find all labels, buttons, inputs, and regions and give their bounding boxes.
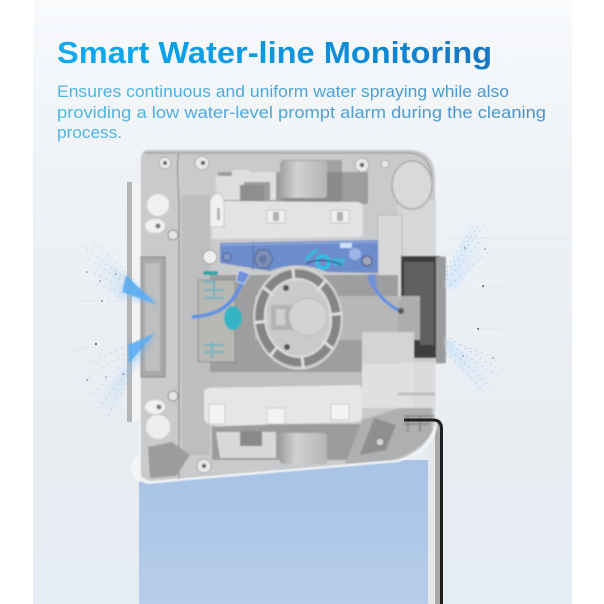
upper mechanism bbox=[216, 170, 276, 200]
window glass bbox=[139, 460, 428, 604]
spray wedges bbox=[445, 222, 490, 290]
device shell bbox=[140, 149, 446, 483]
left knobs bbox=[145, 194, 178, 439]
lower motor bbox=[280, 433, 327, 464]
lower dark recess bbox=[212, 424, 362, 460]
lower right gear area bbox=[345, 408, 432, 464]
left channel column bbox=[182, 195, 210, 455]
description text: Ensures continuous and uniform water spraying while also bbox=[57, 82, 509, 101]
left translucent box bbox=[141, 257, 165, 377]
left water spray bbox=[72, 240, 157, 416]
spray rays bbox=[80, 240, 152, 416]
fan hub bbox=[271, 285, 327, 350]
title: Smart Water-line Monitoring bbox=[57, 35, 492, 70]
screw posts bbox=[159, 156, 389, 473]
right bottom bracket bbox=[404, 416, 434, 432]
hex nut bbox=[254, 250, 273, 268]
window frame and strip bbox=[127, 182, 440, 604]
description text bbox=[57, 82, 546, 142]
round filter ring top right bbox=[392, 161, 432, 209]
translucent right area bbox=[398, 200, 436, 260]
right bump frame bbox=[436, 257, 446, 363]
right electronics box bbox=[362, 332, 436, 408]
lower mechanism bbox=[216, 432, 276, 458]
description text: providing a low water-level prompt alarm during the cleaning bbox=[57, 103, 546, 122]
blue water tube right bbox=[367, 274, 404, 314]
spray droplets bbox=[462, 247, 494, 359]
central housing bbox=[210, 275, 398, 372]
spray wedges bbox=[88, 252, 157, 303]
fan assembly bbox=[249, 263, 347, 373]
right water spray bbox=[445, 222, 572, 392]
right column bbox=[378, 215, 402, 305]
description text: process. bbox=[57, 123, 122, 142]
power cable bbox=[404, 420, 442, 604]
lower water tank bbox=[204, 385, 362, 426]
white corner knob bbox=[131, 454, 153, 482]
blue water tube left bbox=[192, 270, 250, 317]
inner top frame bbox=[145, 153, 432, 178]
lower left mechanism bbox=[148, 442, 190, 478]
upper water tank bbox=[210, 201, 363, 239]
spray rays bbox=[446, 222, 500, 392]
lower tank clips bbox=[209, 404, 349, 424]
spray droplets bbox=[86, 271, 124, 381]
left PCB bbox=[198, 271, 235, 362]
right dark cavity bbox=[372, 256, 440, 358]
cyan oval part bbox=[224, 306, 242, 330]
cyan sensor bbox=[306, 250, 345, 268]
robot cleaner device bbox=[131, 149, 446, 483]
bottom white edge bbox=[142, 425, 436, 482]
tank clips bbox=[210, 193, 349, 227]
fan spokes bbox=[249, 263, 347, 373]
upper motor bbox=[280, 161, 327, 198]
upper dark recess bbox=[218, 172, 368, 204]
blue valve bar bbox=[203, 240, 378, 273]
